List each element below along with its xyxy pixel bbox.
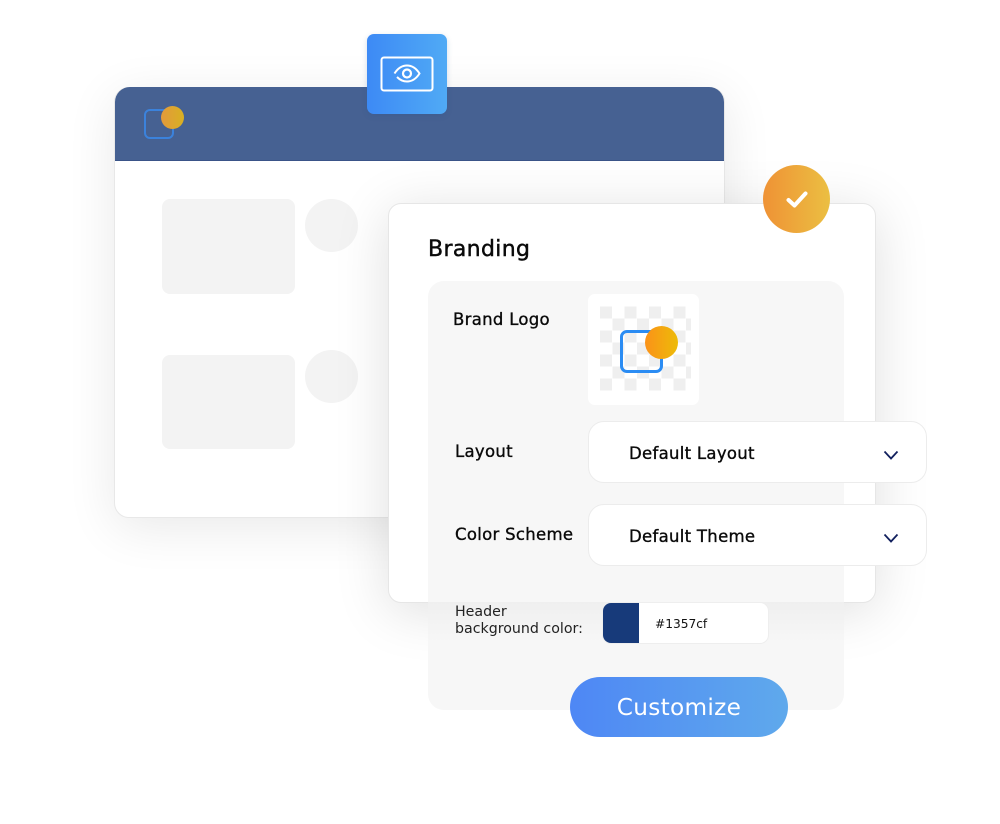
icon: header logo bbox=[144, 106, 184, 139]
icon: chevron bbox=[884, 450, 898, 460]
panel: branding card bbox=[388, 203, 876, 603]
icon: check badge bbox=[763, 165, 830, 233]
color field bbox=[602, 602, 769, 644]
placeholder image 1 bbox=[162, 199, 295, 294]
placeholder image 2 bbox=[162, 355, 295, 449]
placeholder circle 1 bbox=[305, 199, 358, 252]
logo dot bbox=[645, 326, 678, 359]
heading: Branding: Branding bbox=[428, 237, 530, 262]
dropdown: Default Theme bbox=[588, 504, 927, 566]
window header bar bbox=[115, 87, 724, 161]
label: Layout: Layout bbox=[455, 442, 513, 461]
color swatch bbox=[603, 603, 639, 645]
dropdown text: Default Layout bbox=[629, 444, 755, 463]
logo square bbox=[620, 330, 663, 373]
button: Customize bbox=[570, 677, 788, 737]
eye glyph bbox=[380, 56, 434, 92]
panel: browser window bbox=[114, 87, 725, 518]
placeholder circle 2 bbox=[305, 350, 358, 403]
check mark bbox=[786, 191, 808, 208]
button: Customize: Customize bbox=[617, 694, 741, 721]
logo square bbox=[144, 109, 174, 139]
dropdown text: Default Theme bbox=[629, 527, 755, 546]
icon: preview eye tile bbox=[367, 34, 447, 114]
card shadow on form bbox=[428, 602, 844, 642]
transparency checkerboard bbox=[600, 306, 691, 390]
panel: form background bbox=[428, 281, 844, 710]
logo dot bbox=[161, 106, 184, 129]
label: header background color: background color: bbox=[455, 621, 583, 637]
dropdown: Default Layout bbox=[588, 421, 927, 483]
label: header background color bbox=[455, 604, 583, 637]
label: header background color: Header bbox=[455, 604, 507, 620]
color value: #1357cf bbox=[655, 617, 707, 631]
label: Color Scheme: Color Scheme bbox=[455, 525, 573, 544]
panel: logo preview bbox=[588, 294, 699, 405]
icon: chevron bbox=[884, 534, 898, 543]
label: Brand Logo: Brand Logo bbox=[453, 310, 550, 329]
